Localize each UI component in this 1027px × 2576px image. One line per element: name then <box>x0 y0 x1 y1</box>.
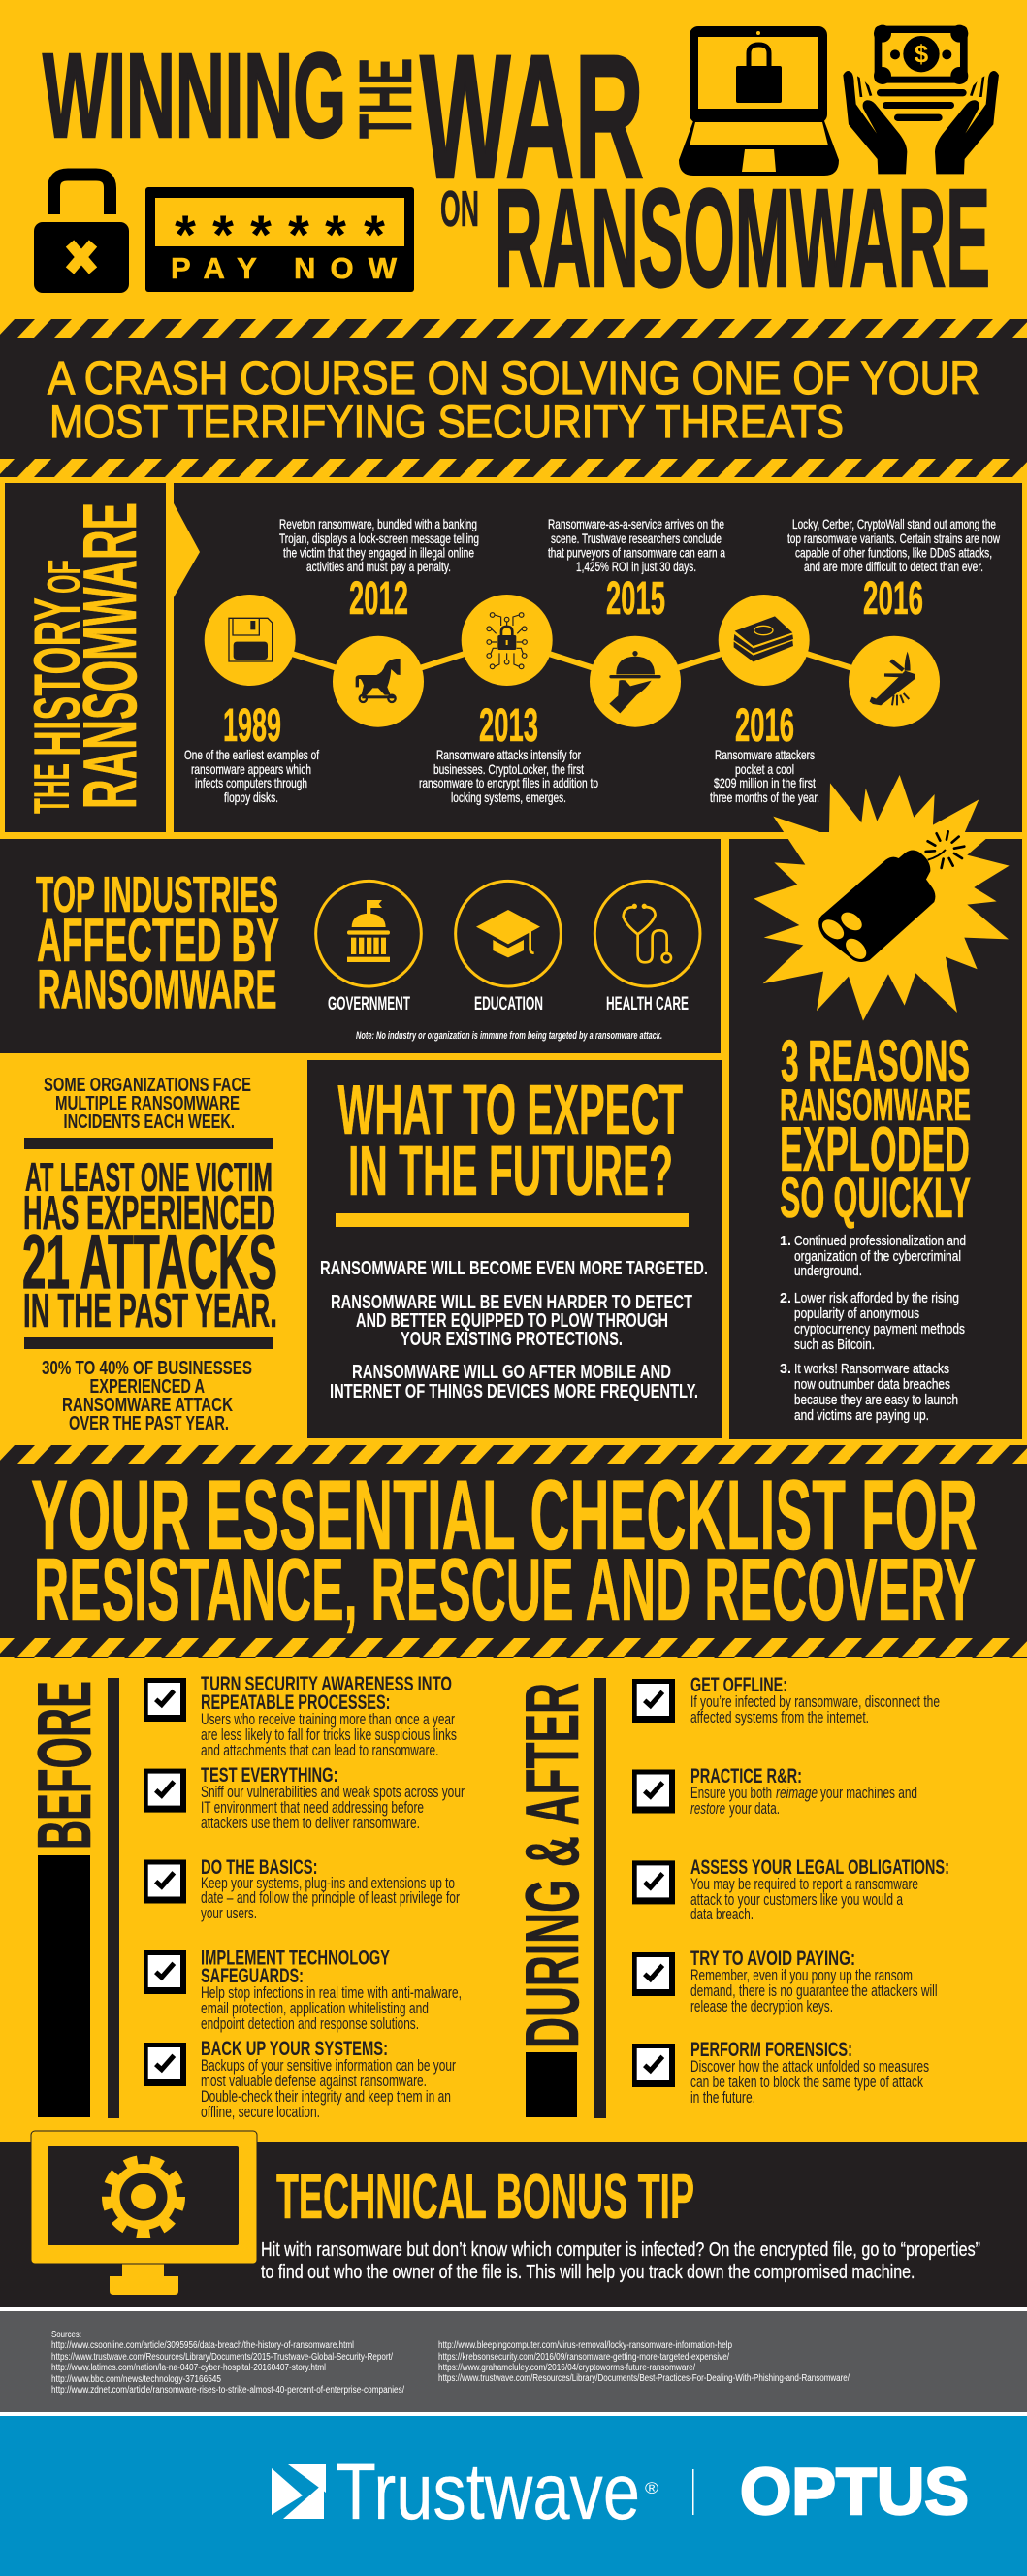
reason 2: 2. <box>780 1291 791 1306</box>
sources column 1: http://www.csoonline.com/article/3095956/data-breach/the-history-of-ransomware.html <box>51 2340 354 2351</box>
panel: sources: Sources: <box>51 2330 81 2340</box>
text: 2016 bottom: Ransomware attackers <box>715 748 815 762</box>
item: legal obligations: You may be required to report a ransomware <box>690 1876 918 1893</box>
stat: 21 attacks: IN THE PAST YEAR. <box>23 1285 277 1337</box>
reason 3: now outnumber data breaches <box>794 1377 950 1393</box>
item: basics: DO THE BASICS: <box>201 1856 318 1879</box>
icon: hand serving cloche <box>609 651 661 713</box>
icon: pay now password box: * <box>175 204 196 265</box>
panel: before checklist <box>21 1673 465 2121</box>
panel: sources <box>0 2311 1027 2412</box>
year labels: 2016 <box>735 700 794 752</box>
panel: three reasons <box>729 839 1022 1439</box>
item: avoid paying: Remember, even if you pony up the ransom <box>690 1967 913 1984</box>
stat: multiple incidents: INCIDENTS EACH WEEK. <box>64 1111 235 1133</box>
icon: dynamite explosion <box>754 775 1010 1021</box>
item: forensics: can be taken to block the same type of attack <box>690 2074 924 2091</box>
item: avoid paying: release the decryption keys. <box>690 1998 833 2015</box>
icon: multi-tool knife <box>870 652 915 705</box>
icon: floppy disk <box>229 618 273 661</box>
stat: businesses <box>42 1357 252 1434</box>
stat: businesses: EXPERIENCED A <box>89 1375 205 1398</box>
item: test everything: IT environment that need addressing before <box>201 1799 424 1817</box>
predictions: RANSOMWARE WILL BE EVEN HARDER TO DETECT <box>331 1291 692 1313</box>
icon: hands holding money <box>843 25 999 174</box>
reason 3: 3. <box>780 1362 791 1377</box>
arrow <box>174 503 200 597</box>
reason 1: underground. <box>794 1264 862 1279</box>
icon: pay now password box <box>145 187 414 292</box>
item: test everything: Sniff our vulnerabilities and weak spots across your <box>201 1784 465 1801</box>
panel: technical bonus tip <box>0 2131 1027 2307</box>
item: basics: your users. <box>201 1905 257 1922</box>
reason 1 <box>780 1234 966 1279</box>
before label <box>21 1681 107 2117</box>
item: basics: date – and follow the principle of least privilege for <box>201 1889 460 1907</box>
item: safeguards: IMPLEMENT TECHNOLOGY <box>201 1948 390 1969</box>
text: 2012: Reveton ransomware, bundled with a banking <box>279 517 477 531</box>
before label: BEFORE <box>21 1681 107 1850</box>
item: forensics: Discover how the attack unfolded so measures <box>690 2058 929 2076</box>
timeline circles <box>205 595 940 727</box>
panel: during and after checklist <box>509 1674 949 2118</box>
item: safeguards: email protection, application whitelisting and <box>201 2000 429 2017</box>
item: basics: Keep your systems, plug-ins and extensions up to <box>201 1875 455 1892</box>
item: backups: Double-check their integrity and keep them in an <box>201 2088 451 2106</box>
panel: what to expect in the future <box>307 1060 722 1438</box>
year labels: 2016 <box>863 573 923 625</box>
icon: circuit padlock <box>487 613 527 669</box>
text: 2013: ransomware to encrypt files in addition to <box>419 776 598 790</box>
predictions <box>320 1257 708 1402</box>
icon: laptop with padlock <box>679 26 839 176</box>
item: test everything <box>144 1764 465 1832</box>
stat: multiple incidents: MULTIPLE RANSOMWARE <box>55 1092 240 1114</box>
item: awareness: TURN SECURITY AWARENESS INTO <box>201 1673 452 1695</box>
item: backups: BACK UP YOUR SYSTEMS: <box>201 2038 388 2060</box>
industry labels: HEALTH CARE <box>606 994 689 1014</box>
sources column 2: https://www.trustwave.com/Resources/Library/Documents/Best-Practices-For-Dealing-With-Phishing-and-Ransomware/ <box>438 2373 850 2384</box>
year labels: 1989 <box>223 700 281 752</box>
item: backups: offline, secure location. <box>201 2104 320 2121</box>
text: 2013: locking systems, emerges. <box>451 790 566 805</box>
during and after label <box>509 1683 594 2117</box>
sources column 1 <box>51 2340 404 2396</box>
item: practice R&R: reimage <box>776 1785 818 1802</box>
heading: TECHNICAL BONUS TIP <box>276 2161 694 2232</box>
item: legal obligations <box>632 1856 949 1923</box>
item: basics <box>144 1856 460 1922</box>
panel: history heading: OF <box>39 560 90 594</box>
reason 3 <box>780 1362 958 1424</box>
icon: government <box>316 881 421 986</box>
sources column 2: http://www.bleepingcomputer.com/virus-removal/locky-ransomware-information-help <box>438 2340 732 2351</box>
logo: Optus: OPTUS <box>740 2455 969 2528</box>
sources column 1: http://www.zdnet.com/article/ransomware-rises-to-strike-almost-40-percent-of-enterprise-companies/ <box>51 2385 404 2396</box>
reason 2: Lower risk afforded by the rising <box>794 1291 959 1306</box>
reason 3: and victims are paying up. <box>794 1408 929 1424</box>
panel: history heading <box>5 483 166 832</box>
reason 2: popularity of anonymous <box>794 1306 919 1322</box>
title <box>43 17 990 316</box>
industry labels <box>328 994 689 1014</box>
item: get offline: GET OFFLINE: <box>690 1674 787 1696</box>
text: 2015: that purveyors of ransomware can earn a <box>548 545 725 561</box>
sources column 1: http://www.bbc.com/news/technology-37166545 <box>51 2374 221 2385</box>
text: 2015: scene. Trustwave researchers conclude <box>551 531 722 546</box>
item: forensics: in the future. <box>690 2089 755 2107</box>
item: legal obligations: attack to your customers like you would a <box>690 1891 904 1909</box>
reason 1: Continued professionalization and <box>794 1234 966 1249</box>
text: 2015: Ransomware-as-a-service arrives on the <box>548 517 724 531</box>
item: get offline: affected systems from the internet. <box>690 1709 869 1726</box>
panel: top industries <box>0 839 721 1053</box>
predictions: INTERNET OF THINGS DEVICES MORE FREQUENTLY. <box>330 1380 698 1402</box>
panel: subtitle <box>0 338 1027 459</box>
item: awareness <box>144 1673 457 1759</box>
text: 2012 <box>279 517 479 574</box>
item: avoid paying <box>632 1948 937 2015</box>
heading: AFFECTED BY <box>37 907 279 975</box>
reason 3: because they are easy to launch <box>794 1393 958 1408</box>
text: 2012: Trojan, displays a lock-screen message telling <box>279 531 479 546</box>
heading <box>337 1072 683 1210</box>
timeline connector <box>250 640 894 682</box>
heading <box>780 1028 971 1230</box>
heading: WHAT TO EXPECT <box>337 1072 683 1149</box>
heading: RANSOMWARE <box>37 958 277 1020</box>
panel: history heading: RANSOMWARE <box>67 502 152 809</box>
sources column 2 <box>438 2340 850 2384</box>
icon: pay now password box: * <box>250 204 272 265</box>
logo: Trustwave: ® <box>645 2479 659 2497</box>
text: 1989: infects computers through <box>195 776 307 790</box>
icon: locked padlock with X <box>34 175 129 293</box>
title: WAR <box>420 17 644 215</box>
reason 2: cryptocurrency payment methods <box>794 1322 965 1337</box>
icon: health care <box>594 881 700 986</box>
item: safeguards: Help stop infections in real time with anti-malware, <box>201 1984 462 2002</box>
icon: pay now password box: * <box>364 204 385 265</box>
industry labels: GOVERNMENT <box>328 994 410 1014</box>
year labels: 2013 <box>479 700 538 752</box>
panel: history heading: HISTORY <box>20 597 94 757</box>
icon: hands holding money: $ <box>915 40 929 69</box>
text: 2013: businesses. CryptoLocker, the first <box>433 762 584 777</box>
reason 2: such as Bitcoin. <box>794 1337 875 1353</box>
sources column 2: https://krebsonsecurity.com/2016/09/ransomware-getting-more-targeted-expensive/ <box>438 2352 729 2363</box>
title: WINNING <box>43 30 346 163</box>
stat: multiple incidents: SOME ORGANIZATIONS FACE <box>44 1074 251 1096</box>
panel: checklist heading <box>0 1460 1027 1639</box>
heading: TOP INDUSTRIES <box>36 867 278 923</box>
item: backups: most valuable defense against ransomware. <box>201 2073 427 2090</box>
icon: pay now password box: PAY NOW <box>171 251 398 285</box>
item: practice R&R <box>632 1765 917 1818</box>
item: safeguards: SAFEGUARDS: <box>201 1965 304 1987</box>
text: 2016 top <box>787 517 1000 574</box>
panel: history heading: THE <box>24 763 80 814</box>
stat: 21 attacks: AT LEAST ONE VICTIM <box>25 1154 273 1200</box>
sources column 2: https://www.grahamcluley.com/2016/04/cryptoworms-future-ransomware/ <box>438 2363 695 2373</box>
item: backups <box>144 2038 456 2121</box>
predictions: RANSOMWARE WILL GO AFTER MOBILE AND <box>352 1361 671 1383</box>
item: get offline: If you’re infected by ransomware, disconnect the <box>690 1693 940 1711</box>
year labels: 2012 <box>349 573 408 625</box>
text: 2016 bottom: three months of the year. <box>710 790 819 805</box>
reason 1: organization of the cybercriminal <box>794 1249 961 1265</box>
year labels <box>223 573 923 752</box>
reason 3: It works! Ransomware attacks <box>794 1362 949 1377</box>
item: practice R&R: your machines and <box>820 1785 917 1802</box>
stat: multiple incidents <box>44 1074 251 1133</box>
panel: logos footer <box>0 2416 1027 2576</box>
predictions: RANSOMWARE WILL BECOME EVEN MORE TARGETED. <box>320 1257 708 1279</box>
item: awareness: Users who receive training more than once a year <box>201 1711 455 1728</box>
text: 1989: One of the earliest examples of <box>184 748 319 762</box>
icon: trojan horse <box>356 659 401 702</box>
item: practice R&R: your data. <box>729 1800 780 1818</box>
icon: pay now password box: * <box>325 204 346 265</box>
item: test everything: attackers use them to deliver ransomware. <box>201 1815 420 1832</box>
note: Note: No industry or organization is immune from being targeted by a ransomware attack. <box>356 1030 662 1042</box>
text: 2012: activities and must pay a penalty. <box>306 560 451 574</box>
stat: businesses: RANSOMWARE ATTACK <box>62 1394 233 1416</box>
item: practice R&R: restore <box>690 1800 725 1818</box>
text: 2016 bottom <box>710 748 819 805</box>
icon: pay now password box: * <box>212 204 234 265</box>
title: ON <box>440 181 479 238</box>
item: forensics <box>632 2039 929 2107</box>
tip text <box>261 2239 980 2283</box>
item: test everything: TEST EVERYTHING: <box>201 1764 337 1787</box>
during and after label: DURING & AFTER <box>509 1683 594 2048</box>
icon: pay now password box: * <box>288 204 309 265</box>
icon: monitor with gear <box>31 2131 257 2295</box>
stat: businesses: 30% TO 40% OF BUSINESSES <box>42 1357 252 1379</box>
panel: attack statistics <box>22 1074 277 1434</box>
item: avoid paying: demand, there is no guarantee the attackers will <box>690 1982 937 2000</box>
item: awareness: are less likely to fall for tricks like suspicious links <box>201 1726 457 1744</box>
icon: education <box>456 881 561 986</box>
item: legal obligations: data breach. <box>690 1906 754 1923</box>
predictions: YOUR EXISTING PROTECTIONS. <box>401 1328 623 1350</box>
item: backups: Backups of your sensitive information can be your <box>201 2057 456 2075</box>
text: 2015: 1,425% ROI in just 30 days. <box>576 560 696 574</box>
text: 2016 bottom: pocket a cool <box>735 762 794 777</box>
sources column 1: http://www.latimes.com/nation/la-na-0407-cyber-hospital-20160407-story.html <box>51 2363 326 2373</box>
item: safeguards: endpoint detection and response solutions. <box>201 2015 419 2033</box>
stat: 21 attacks: HAS EXPERIENCED <box>23 1187 275 1240</box>
item: practice R&R: Ensure you both <box>690 1785 772 1802</box>
heading <box>36 867 279 1020</box>
text: 2015 <box>548 517 725 574</box>
stat: businesses: OVER THE PAST YEAR. <box>69 1412 229 1434</box>
text: 1989 <box>184 748 319 805</box>
stat: 21 attacks: 21 ATTACKS <box>22 1218 277 1304</box>
item: safeguards <box>144 1948 462 2033</box>
reason 1: 1. <box>780 1234 791 1249</box>
text: 2012: the victim that they engaged in illegal online <box>283 545 474 561</box>
industry labels: EDUCATION <box>474 994 543 1014</box>
sources column 1: https://www.trustwave.com/Resources/Library/Documents/2015-Trustwave-Global-Security-Report/ <box>51 2352 393 2363</box>
item: avoid paying: TRY TO AVOID PAYING: <box>690 1948 855 1970</box>
item: forensics: PERFORM FORENSICS: <box>690 2039 852 2061</box>
item: get offline <box>632 1674 940 1726</box>
year labels: 2015 <box>606 573 665 625</box>
reason 2 <box>780 1291 965 1353</box>
predictions: AND BETTER EQUIPPED TO PLOW THROUGH <box>356 1309 668 1332</box>
item: practice R&R: PRACTICE R&R: <box>690 1765 802 1787</box>
text: 2013: Ransomware attacks intensify for <box>436 748 581 762</box>
text: 1989: ransomware appears which <box>191 762 311 777</box>
item: awareness: REPEATABLE PROCESSES: <box>201 1691 390 1714</box>
logo: Trustwave: Trustwave <box>336 2448 640 2536</box>
icon: stack of money <box>734 616 793 661</box>
text: 2013 <box>419 748 598 805</box>
text: 1989: floppy disks. <box>224 790 278 805</box>
stat: 21 attacks <box>22 1154 277 1337</box>
panel: history timeline <box>174 483 1022 832</box>
text: 2016 bottom: $209 million in the first <box>714 776 816 790</box>
item: awareness: and attachments that can lead to ransomware. <box>201 1742 438 1759</box>
heading: IN THE FUTURE? <box>348 1133 673 1210</box>
panel: subtitle: MOST TERRIFYING SECURITY THREATS <box>49 396 844 447</box>
